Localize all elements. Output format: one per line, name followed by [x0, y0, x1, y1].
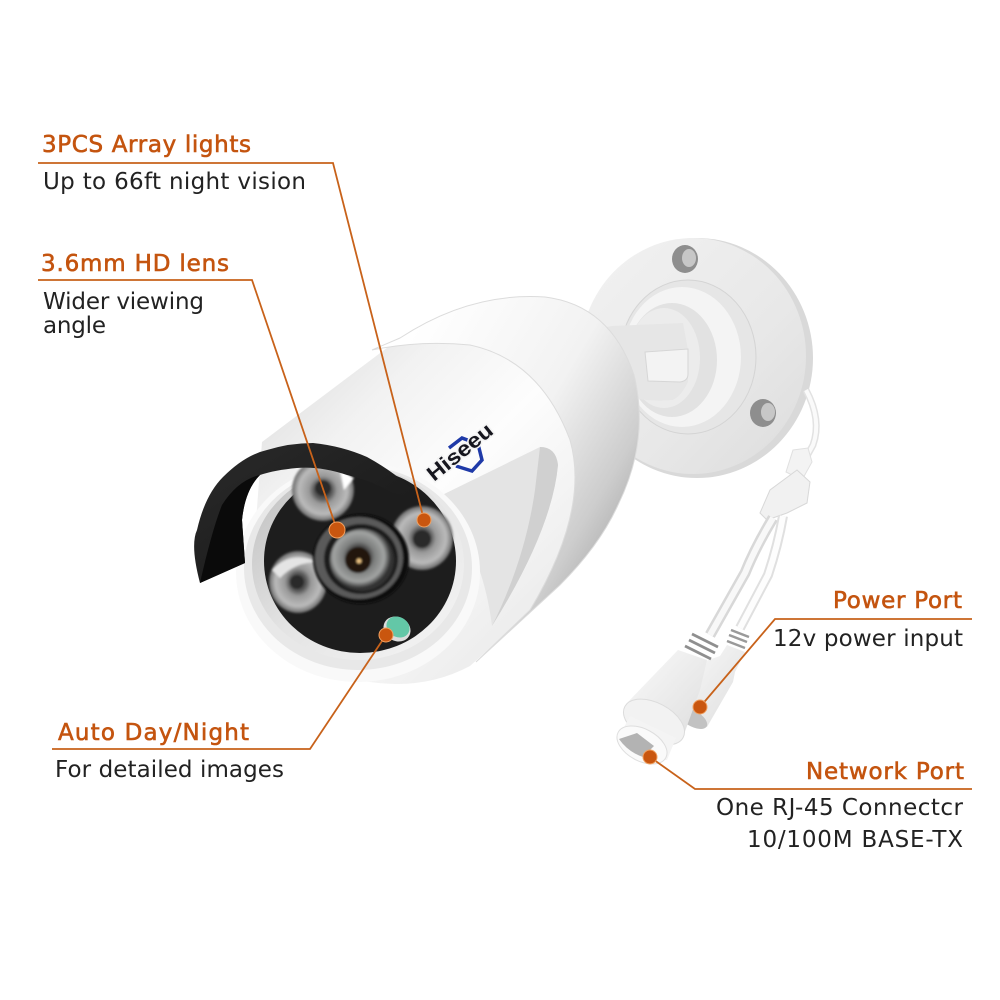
mount plate: [580, 238, 813, 478]
flange: [616, 690, 692, 754]
heading: 3PCS Array lights: [42, 132, 251, 158]
led right: [391, 506, 453, 570]
callout: 3.6mm HD lens: [38, 251, 345, 538]
heading: Network Port: [806, 759, 964, 785]
description: Wider viewing: [43, 289, 204, 315]
heading: Power Port: [833, 588, 962, 614]
marker: [379, 628, 393, 642]
marker: [417, 513, 431, 527]
splitter: [760, 470, 810, 520]
black faceplate: [264, 469, 456, 653]
marker: [643, 750, 657, 764]
network connector: [611, 634, 718, 772]
cylinder housing: [250, 297, 639, 684]
visor: [194, 443, 427, 583]
main lens: [313, 514, 409, 604]
splitter neck: [786, 448, 812, 480]
left cable: [710, 518, 773, 635]
description: One RJ-45 Connectcr: [716, 795, 964, 821]
description line two: angle: [43, 313, 106, 339]
callout: power port: [693, 588, 972, 714]
rear section: [372, 297, 639, 662]
led top: [292, 459, 354, 521]
screw hole top: [672, 245, 698, 273]
upper cable: [802, 390, 816, 465]
screw hole bottom: [750, 399, 776, 427]
right cable: [740, 516, 783, 628]
leader line: [700, 619, 972, 707]
leader line: [52, 635, 386, 749]
description: For detailed images: [55, 757, 284, 783]
marker: [329, 522, 345, 538]
leader line: [650, 757, 972, 789]
status sensor: [379, 612, 415, 646]
led left: [269, 551, 327, 613]
callout: auto day/night: [52, 628, 393, 783]
description line two: 10/100M BASE-TX: [747, 827, 963, 853]
heading: Auto Day/Night: [58, 720, 249, 746]
front ring: [236, 462, 480, 682]
marker: [693, 700, 707, 714]
description: 12v power input: [773, 626, 963, 652]
mount arm: [590, 323, 688, 401]
side recess: [438, 447, 558, 626]
heading: 3.6mm HD lens: [41, 251, 229, 277]
callout: 3PCS array lights: [38, 132, 431, 527]
leader line: [38, 163, 424, 520]
cable assembly: [611, 390, 816, 772]
wall mount: [580, 238, 813, 478]
logo: Hiseeu: [423, 419, 498, 486]
mount hub: [620, 280, 756, 434]
leader line: [38, 280, 337, 530]
power connector: [673, 630, 749, 733]
description: Up to 66ft night vision: [43, 169, 306, 195]
callout: network port: [643, 750, 972, 853]
plug end: [620, 716, 676, 760]
camera body: [194, 297, 639, 684]
